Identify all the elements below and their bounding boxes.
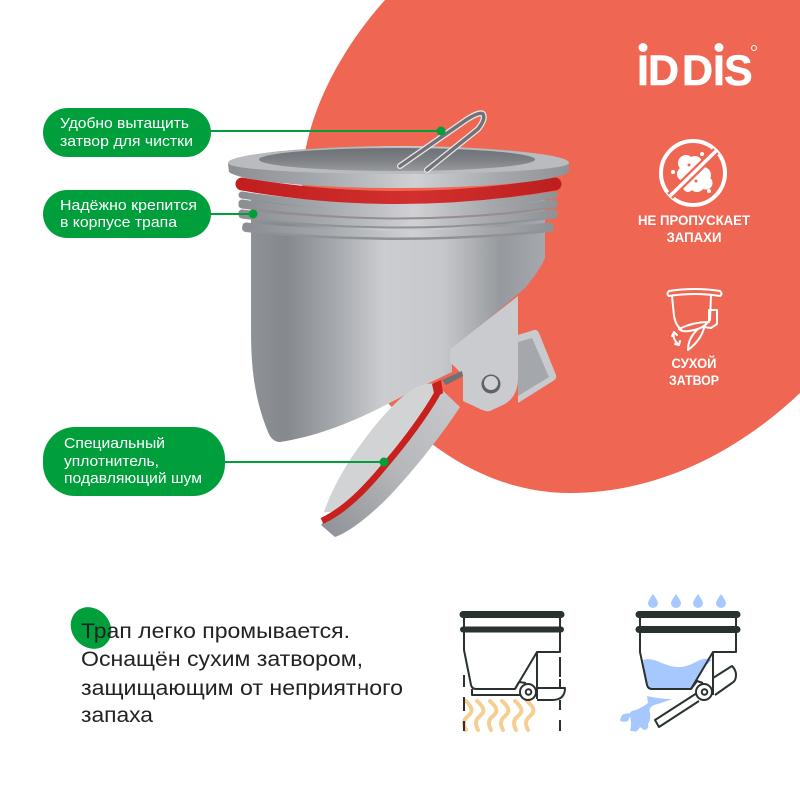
hinge pin <box>482 374 500 394</box>
text: no odours label <box>638 213 751 245</box>
back tab of hinge <box>518 330 556 403</box>
text: no odours label: ЗАПАХИ <box>666 230 722 245</box>
text: dry shutter label: ЗАТВОР <box>669 373 719 388</box>
description text <box>62 599 403 727</box>
icon: no odours <box>661 141 725 205</box>
odour waves <box>464 701 533 730</box>
flap seal <box>322 380 443 521</box>
callout: fixed reliably <box>43 190 258 238</box>
cylinder body <box>251 200 545 442</box>
callout: fixed reliably: в корпусе трапа <box>60 214 178 231</box>
icon: dry shutter <box>668 289 722 350</box>
hinge bracket <box>450 296 518 411</box>
water drops <box>648 594 726 608</box>
description text: защищающим от неприятного <box>81 677 403 700</box>
description text: Оснащён сухим затвором, <box>81 648 363 671</box>
background blob <box>302 0 800 493</box>
diagram: closed shutter blocks odours <box>463 614 565 731</box>
text: no odours label: НЕ ПРОПУСКАЕТ <box>638 213 751 228</box>
flange opening <box>259 148 535 171</box>
water <box>643 659 712 689</box>
flap face <box>324 384 438 512</box>
flap side <box>321 388 460 537</box>
callout: special seal: Специальный <box>64 435 165 452</box>
callout: special seal <box>43 427 388 496</box>
water splash <box>630 696 672 732</box>
description text: запаха <box>81 704 153 727</box>
callout: special seal: уплотнитель, <box>64 453 159 470</box>
logo: IDDIS <box>637 47 753 95</box>
callout: special seal: подавляющий шум <box>64 470 202 487</box>
red sealing ring <box>242 184 555 198</box>
flange <box>228 146 569 188</box>
text: dry shutter label <box>669 356 719 388</box>
product: drain shutter <box>228 113 569 537</box>
description text: Трап легко промывается. <box>81 620 350 643</box>
callout: fixed reliably: Надёжно крепится <box>60 197 197 214</box>
threads <box>242 195 554 236</box>
diagram: open shutter with water <box>620 594 737 732</box>
hinge arm <box>442 371 463 385</box>
callout: easy to pull out: Удобно вытащить <box>60 115 189 132</box>
callout: easy to pull out: затвор для чистки <box>60 133 193 150</box>
text: dry shutter label: СУХОЙ <box>672 356 716 371</box>
green accent blob <box>62 599 120 657</box>
pull ring <box>400 113 484 170</box>
callout: easy to pull out <box>43 108 446 157</box>
